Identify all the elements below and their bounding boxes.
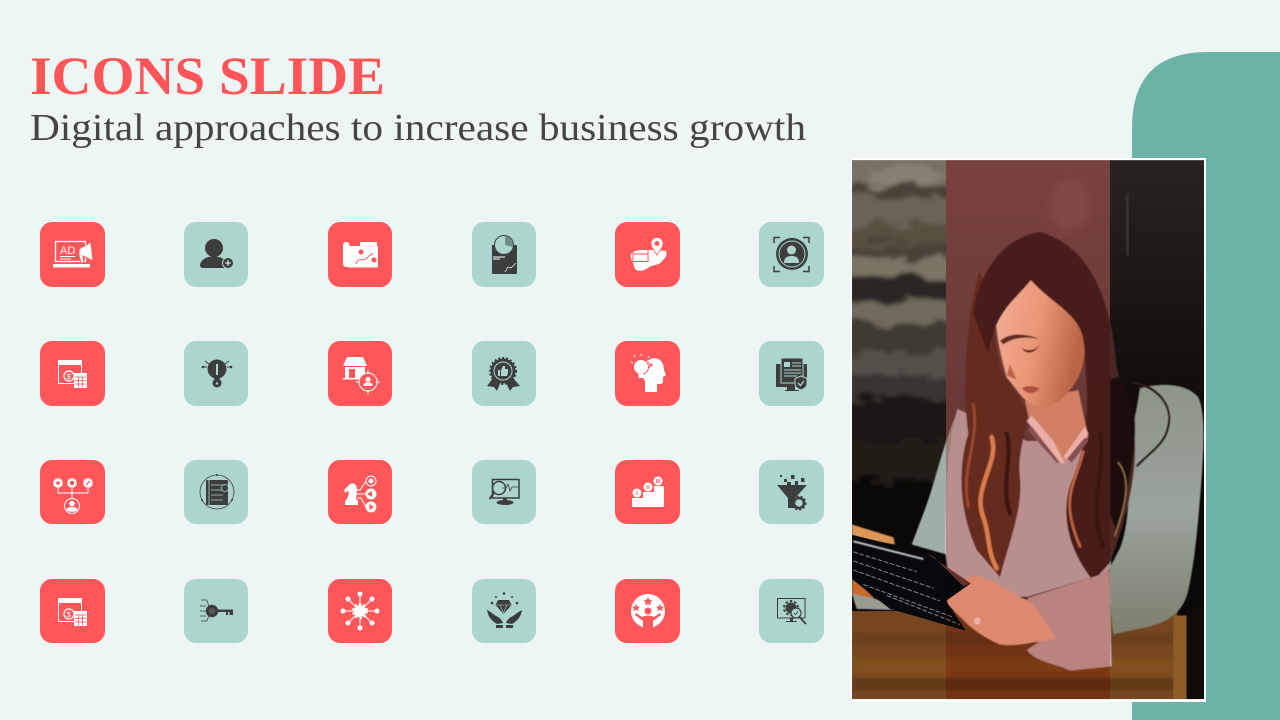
icon tile: idea alert bulb — [184, 341, 248, 406]
icon tile: target audience — [759, 222, 824, 287]
icon tile: budget calendar repeat — [40, 579, 105, 643]
face — [996, 277, 1084, 407]
icon tile: data funnel — [759, 460, 824, 524]
icon tile: head with idea bulb — [615, 341, 680, 406]
left sleeve — [911, 418, 956, 555]
left hand and cuff — [852, 525, 895, 545]
top hair — [973, 232, 1117, 386]
torso — [945, 409, 1117, 597]
tablet — [852, 535, 971, 631]
icon tile: ad on laptop: AD — [60, 245, 75, 257]
icon tile: monitor gear search — [759, 579, 824, 643]
facial features — [1000, 335, 1040, 345]
icon grid — [40, 222, 824, 643]
icon tile: monitor analytics — [472, 460, 536, 524]
icon tile: secure document on monitor — [759, 341, 824, 406]
hair highlights — [966, 405, 1126, 568]
icon tile: network gear — [328, 579, 392, 643]
icon tile: business location — [615, 222, 680, 287]
icon tile: strategy map — [328, 222, 392, 287]
table — [852, 611, 1177, 699]
icon tile: budget calendar — [40, 341, 105, 406]
title: ICONS SLIDE — [30, 45, 385, 106]
icon tile: report with pie chart — [472, 222, 536, 287]
photo: woman reading a tablet — [851, 158, 1206, 702]
icon tile: hands holding diamond — [472, 579, 536, 643]
collar — [1027, 415, 1088, 463]
teal rounded panel — [1132, 52, 1280, 720]
icon tile: budget calendar repeat: $ — [67, 610, 72, 619]
icon tile: quality badge — [472, 341, 536, 406]
right sleeve — [1107, 385, 1203, 634]
icon tile: growth steps — [615, 460, 680, 524]
hand — [947, 576, 1057, 645]
red tint band — [946, 160, 1110, 699]
icon tile: digital key — [184, 579, 248, 643]
neck — [1025, 390, 1088, 463]
icon tile: budget calendar: $ — [67, 372, 72, 381]
icon tile: store target customers — [328, 341, 392, 406]
right hair — [1066, 328, 1135, 581]
icon tile: notebook in circle — [184, 460, 248, 524]
photo white frame — [851, 158, 1206, 702]
icon tile: employee recognition — [615, 579, 680, 643]
icon tile: marketing strategy knight — [328, 460, 392, 524]
pink cuff — [1027, 572, 1112, 671]
subtitle: Digital approaches to increase business growth — [30, 107, 806, 149]
icon tile: ad on laptop — [40, 222, 105, 287]
left hair — [961, 270, 1028, 577]
icon tile: add user — [184, 222, 248, 287]
icon tile: user options tree — [40, 460, 105, 524]
